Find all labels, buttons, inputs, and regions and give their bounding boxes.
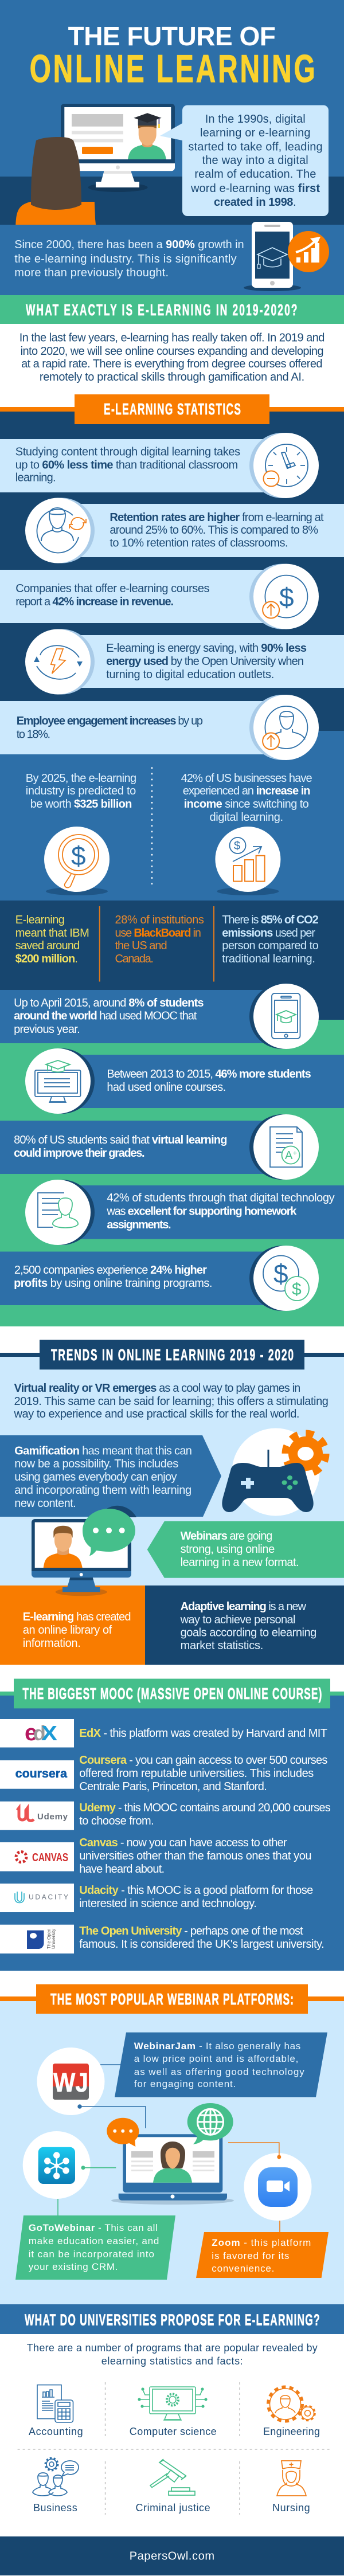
icon: two people, gear and speech bubble: [33, 2458, 79, 2496]
icon: document with A+: [270, 1127, 302, 1167]
callout: e-learning library: an online library of: [23, 1624, 112, 1637]
callout: history of e-learning: In the 1990s, digital: [205, 113, 306, 126]
heading: trends in online learning: TRENDS IN ONLINE LEARNING 2019 - 2020: [51, 1346, 294, 1364]
stat: 8% of students MOOC: previous year.: [14, 1023, 80, 1036]
callout: GoToWebinar: [15, 2215, 175, 2280]
fact: IBM savings: $200 million.: [15, 953, 78, 965]
callout: WebinarJam: as well as offering good technology: [134, 2066, 304, 2077]
stat: energy saving: [25, 629, 344, 695]
icon: Zoom logo: [244, 2153, 312, 2221]
text: programs intro: elearning statistics and facts:: [101, 2355, 243, 2367]
stat: homework assignments: 42% of students through that digital technology: [107, 1192, 335, 1204]
icon: coins: $: [292, 1280, 302, 1299]
stat: 42% income increase: [181, 772, 312, 895]
footer: [0, 2536, 344, 2575]
logo: edX: [25, 1720, 57, 1745]
stat: 60% less time: Studying content through digital learning takes: [15, 446, 240, 459]
logo: Open University: [27, 1928, 56, 1949]
icon: lightning bolt cycle: [34, 645, 83, 679]
icon: GoToWebinar logo: [23, 2131, 91, 2199]
icon: clock: [264, 444, 308, 487]
icon label: A+ grade: A: [285, 1149, 292, 1162]
icon: nurse: [277, 2461, 306, 2496]
callout: history of e-learning: realm of education. The: [194, 168, 316, 181]
title: ONLINE LEARNING: [30, 48, 315, 91]
row: Open University: famous. It is considered the UK's largest university.: [79, 1938, 325, 1951]
icon: monitor with cap: [35, 1060, 80, 1102]
icon: WebinarJam logo: WJ: [53, 2067, 88, 2097]
program: engineering: Engineering: [263, 2426, 320, 2437]
text: programs intro: There are a number of programs that are popular revealed by: [27, 2342, 318, 2354]
fact: BlackBoard: use BlackBoard in: [115, 927, 201, 939]
fact: CO2 emissions: There is 85% of CO2: [222, 914, 319, 926]
logo: Canvas: [16, 1851, 68, 1864]
program: computer science: [130, 2387, 217, 2437]
icon: coins: $: [273, 1259, 288, 1289]
callout: history of e-learning: created in 1998.: [214, 196, 296, 209]
divider: dotted line: [151, 767, 153, 888]
stat: homework assignments: assignments.: [107, 1219, 171, 1231]
callout: history of e-learning: learning or e-learning: [200, 127, 311, 139]
text: virtual reality: 2019. This same can be said for learning; this offers a stimulating: [14, 1395, 329, 1408]
row: Udacity: interested in science and technology.: [79, 1897, 257, 1910]
fact: CO2 emissions: [222, 914, 319, 965]
callout: gamification: [0, 1435, 221, 1517]
heading: e-learning statistics: E-LEARNING STATISTICS: [104, 400, 241, 418]
stat: $325 billion prediction: industry is predicted to: [26, 785, 136, 797]
stat: 42% income increase: income since switching to: [184, 798, 309, 811]
callout: adaptive learning: market statistics.: [181, 1639, 263, 1652]
row: edX: EdX - this platform was created by Harvard and MIT: [79, 1727, 327, 1740]
stat: 8% of students MOOC: around the world had used MOOC that: [14, 1010, 197, 1023]
icon: tablet with cap: [272, 993, 300, 1039]
callout: WebinarJam: for engaging content.: [134, 2078, 236, 2089]
stat: employee engagement: [0, 695, 319, 760]
icon: tablet with growth chart: [244, 222, 329, 291]
stat: 42% income increase: digital learning.: [210, 811, 283, 824]
callout: webinars: strong, using online: [181, 1543, 275, 1556]
row: Udacity: [0, 1884, 313, 1912]
heading: e-learning statistics: [0, 394, 344, 424]
logo: Udemy: Udemy: [37, 1812, 68, 1822]
program: accounting: Accounting: [29, 2426, 83, 2437]
fact: BlackBoard: [115, 914, 204, 965]
heading: biggest MOOC: [0, 1679, 344, 1708]
stat: energy saving: turning to digital education outlets.: [106, 668, 274, 681]
icon: person with sync arrows: [37, 508, 86, 553]
fact: CO2 emissions: traditional learning.: [222, 953, 315, 965]
arrow: WebinarJam connector: [77, 2104, 146, 2128]
stat: 60% less time: learning.: [15, 472, 56, 484]
panel: mid-blue predictions background: [0, 731, 344, 901]
text: e-learning intro: remotely to practical skills through gamification and AI.: [40, 371, 304, 383]
text: e-learning intro: In the last few years, e-learning has really taken off. In 2019 and: [19, 332, 325, 344]
stat: energy saving: E-learning is energy saving, with 90% less: [106, 642, 307, 655]
callout: GoToWebinar: make education easier, and: [29, 2236, 159, 2246]
stat: 42% revenue increase: Companies that offer e-learning courses: [15, 582, 209, 595]
icon: student with document: [38, 1193, 78, 1228]
stat: retention rates: Retention rates are higher from e-learning at: [110, 511, 324, 524]
stat: 24% higher profits: [0, 1246, 319, 1311]
callout: adaptive learning: goals according to elearning: [181, 1627, 316, 1639]
callout: WebinarJam: WebinarJam - It also generally has: [134, 2041, 300, 2052]
stat: 8% of students MOOC: [0, 984, 319, 1049]
stat: $325 billion prediction: be worth $325 billion: [30, 798, 132, 811]
stat: virtual learning grades: [0, 1114, 319, 1180]
text: 900% growth: Since 2000, there has been a 900% growth in: [14, 238, 244, 251]
stat: retention rates: [25, 498, 344, 563]
illustration: student at monitor: [15, 104, 175, 225]
program: nursing: [272, 2461, 310, 2514]
row: Coursera: offered from reputable universities. This includes: [79, 1767, 314, 1780]
heading: popular webinar platforms: [0, 1984, 344, 2014]
illustration: webinar monitor with speech bubble: [32, 1506, 136, 1596]
program: accounting: [29, 2385, 83, 2437]
heading: trends in online learning: [0, 1340, 344, 1369]
callout: Zoom: Zoom - this platform: [212, 2237, 311, 2248]
stat: homework assignments: was excellent for supporting homework: [106, 1205, 297, 1218]
callout: GoToWebinar: GoToWebinar - This can all: [29, 2222, 158, 2233]
panel: green background: [0, 990, 344, 1326]
callout: gamification: using games everybody can enjoy: [14, 1471, 177, 1483]
heading: what exactly is e-learning: WHAT EXACTLY IS E-LEARNING IN 2019-2020?: [26, 301, 297, 319]
callout: webinars: learning in a new format.: [181, 1556, 299, 1569]
stat: virtual learning grades: could improve their grades.: [14, 1147, 145, 1160]
row: Coursera: Centrale Paris, Princeton, and Stanford.: [79, 1780, 267, 1793]
program: nursing: Nursing: [272, 2502, 310, 2514]
text: virtual reality: Virtual reality or VR emerges as a cool way to play games in: [14, 1382, 300, 1395]
stat: energy saving: energy used by the Open University when: [106, 655, 304, 668]
logo: Udacity: UDACITY: [29, 1893, 68, 1901]
program: engineering: [263, 2387, 320, 2437]
text: e-learning intro: into 2020, we will see online courses expanding and developing: [21, 345, 324, 358]
text: 900% growth: [14, 238, 244, 279]
stat: 46% more students: [25, 1048, 344, 1114]
stat: 8% of students MOOC: Up to April 2015, around 8% of students: [14, 997, 204, 1009]
row: Udacity: Udacity - this MOOC is a good platform for those: [79, 1884, 313, 1897]
logo: Coursera: coursera: [15, 1767, 67, 1780]
program: criminal justice: Criminal justice: [135, 2502, 210, 2514]
stat: 24% higher profits: profits by using online training programs.: [14, 1277, 212, 1290]
callout: e-learning library: information.: [23, 1637, 81, 1650]
row: Udemy: Udemy - this MOOC contains around 20,000 courses: [79, 1802, 331, 1814]
icon: income chart: [215, 827, 280, 895]
logo: edX: d: [33, 1721, 46, 1745]
program: criminal justice: [135, 2459, 210, 2514]
fact: CO2 emissions: emissions used per: [222, 927, 315, 939]
illustration: gamepad with gear: [222, 1428, 326, 1516]
arrow: GoToWebinar connector: [58, 2166, 116, 2216]
callout: WebinarJam: a low price point and is affordable,: [134, 2053, 298, 2064]
row: Coursera: [0, 1754, 327, 1793]
stat: $325 billion prediction: By 2025, the e-learning: [26, 772, 136, 785]
fact: IBM savings: saved around: [15, 939, 80, 952]
logo: Udacity: [15, 1892, 68, 1903]
row: Open University: The Open University - perhaps one of the most: [79, 1925, 303, 1937]
callout: e-learning library: E-learning has created: [23, 1611, 131, 1623]
fact: CO2 emissions: person compared to: [222, 939, 319, 952]
callout: history of e-learning: the way into a digital: [202, 154, 308, 167]
callout: Zoom: [196, 2232, 329, 2278]
heading: what exactly is e-learning: [0, 295, 344, 324]
panel: header: [0, 0, 344, 295]
callout: GoToWebinar: it can be incorporated into: [29, 2249, 154, 2260]
stat: 46% more students: Between 2013 to 2015, 46% more students: [107, 1068, 311, 1080]
panel: light-blue trends background: [0, 1357, 344, 1586]
program: business: [33, 2458, 79, 2514]
callout: Zoom: convenience.: [212, 2263, 274, 2274]
icon: monitor with gear and circuits: [138, 2387, 207, 2420]
callout: adaptive learning: [145, 1585, 344, 1665]
logo: Canvas: CANVAS: [32, 1851, 68, 1864]
icon: WebinarJam logo: [37, 2048, 104, 2115]
row: Canvas: universities other than the famous ones that you: [79, 1850, 311, 1862]
text: e-learning intro: at a rapid rate. There is everything from degree courses offered: [21, 358, 323, 370]
callout: history of e-learning: started to take off, leading: [188, 141, 323, 154]
icon: dollar with up arrow: $: [279, 582, 294, 612]
row: Coursera: Coursera - you can gain access to over 500 courses: [79, 1754, 327, 1767]
row: Udemy: to choose from.: [79, 1815, 154, 1827]
callout: Zoom: is favored for its: [212, 2250, 289, 2261]
icon: coins: [263, 1255, 309, 1301]
callout: GoToWebinar: your existing CRM.: [29, 2261, 118, 2272]
logo: edX: X: [41, 1721, 57, 1745]
icon: gears with person: [268, 2387, 315, 2421]
stat: 60% less time: up to 60% less time than traditional classroom: [15, 459, 238, 471]
panel: three facts: [0, 901, 344, 990]
text: virtual reality: way to experience and use practical skills for the real world.: [14, 1408, 299, 1420]
heading: popular webinar platforms: THE MOST POPULAR WEBINAR PLATFORMS:: [50, 1990, 294, 2008]
program: computer science: Computer science: [130, 2426, 217, 2437]
icon: gavel: [150, 2459, 195, 2495]
fact: BlackBoard: Canada.: [115, 953, 154, 965]
stat: retention rates: to 10% retention rates of classrooms.: [110, 537, 288, 550]
fact: IBM savings: E-learning: [15, 914, 65, 926]
arrow: Zoom connector: [228, 2143, 281, 2233]
stat: 42% income increase: 42% of US businesses have: [181, 772, 312, 785]
icon: magnifying glass dollar: $: [71, 841, 86, 871]
icon label: A+ grade: +: [292, 1148, 298, 1157]
callout: gamification: new content.: [14, 1497, 76, 1510]
text: e-learning intro: [19, 332, 325, 383]
callout: adaptive learning: way to achieve personal: [180, 1614, 296, 1626]
row: Open University: [0, 1925, 325, 1953]
heading: what do universities propose: [0, 2304, 344, 2334]
heading: what do universities propose: WHAT DO UNIVERSITIES PROPOSE FOR E-LEARNING?: [25, 2311, 320, 2329]
stat: $325 billion prediction: [26, 772, 136, 895]
icon: magnifying glass dollar: [44, 827, 110, 895]
callout: webinars: [147, 1521, 344, 1578]
panel: MOOC background: [0, 1696, 344, 1971]
program: business: Business: [33, 2502, 77, 2514]
row: Canvas: Canvas - now you can have access to other: [79, 1837, 287, 1849]
logo: Open University: The Open: [46, 1928, 52, 1949]
callout: gamification: and incorporating them with learning: [14, 1484, 191, 1497]
text: virtual reality: [14, 1382, 329, 1420]
fact: IBM savings: [15, 914, 89, 965]
stat: 60% less time: [0, 433, 319, 498]
fact: IBM savings: meant that IBM: [15, 927, 89, 939]
callout: adaptive learning: Adaptive learning is a new: [181, 1600, 306, 1613]
icon: dollar with up arrow: [263, 576, 307, 618]
fact: BlackBoard: the US and: [115, 939, 167, 952]
icon: person with up arrow: [263, 706, 307, 750]
callout: e-learning library: [0, 1585, 145, 1665]
logo: Open University: University: [51, 1929, 56, 1949]
callout: history of e-learning: [160, 105, 329, 216]
title: [30, 21, 315, 91]
text: 900% growth: more than previously thought.: [14, 267, 169, 279]
callout: webinars: Webinars are going: [181, 1530, 272, 1543]
panel: dark statistics background: [0, 412, 344, 731]
footer: PapersOwl.com: [130, 2550, 214, 2562]
stat: 46% more students: had used online courses.: [107, 1081, 226, 1094]
text: programs intro: [27, 2342, 318, 2367]
icon: document and calculator: [37, 2385, 73, 2422]
text: 900% growth: the e-learning industry. This is significantly: [14, 253, 237, 265]
stat: 42% revenue increase: [0, 564, 319, 629]
stat: employee engagement: Employee engagement increases by up: [17, 715, 203, 727]
icon: income chart: $: [234, 840, 240, 852]
panel: webinar platforms background: [0, 2001, 344, 2304]
row: edX: [0, 1719, 327, 1747]
row: Udemy: [0, 1802, 331, 1830]
divider grid: [18, 2382, 330, 2515]
title: THE FUTURE OF: [68, 21, 276, 51]
fact: BlackBoard: 28% of institutions: [115, 914, 204, 926]
callout: gamification: now be a possibility. This includes: [14, 1458, 178, 1470]
callout: WebinarJam: [100, 2033, 327, 2097]
callout: history of e-learning: word e-learning was first: [190, 182, 320, 195]
row: Canvas: have heard about.: [79, 1863, 165, 1876]
logo: Udemy: [17, 1808, 68, 1822]
stat: homework assignments: [25, 1180, 344, 1245]
logo: edX: e: [25, 1720, 37, 1745]
stat: virtual learning grades: 80% of US students said that virtual learning: [14, 1134, 227, 1146]
row: Canvas: [0, 1837, 312, 1876]
stat: 24% higher profits: 2,500 companies experience 24% higher: [14, 1264, 207, 1277]
stat: 42% income increase: experienced an increase in: [183, 785, 311, 797]
stat: employee engagement: to 18%.: [17, 728, 50, 741]
heading: biggest MOOC: THE BIGGEST MOOC (MASSIVE OPEN ONLINE COURSE): [22, 1685, 322, 1702]
illustration: laptop presenter: [107, 2103, 234, 2205]
stat: 42% revenue increase: report a 42% increase in revenue.: [15, 596, 174, 608]
callout: gamification: Gamification has meant that this can: [14, 1445, 192, 1458]
stat: retention rates: around 25% to 60%. This is compared to 8%: [110, 524, 318, 537]
